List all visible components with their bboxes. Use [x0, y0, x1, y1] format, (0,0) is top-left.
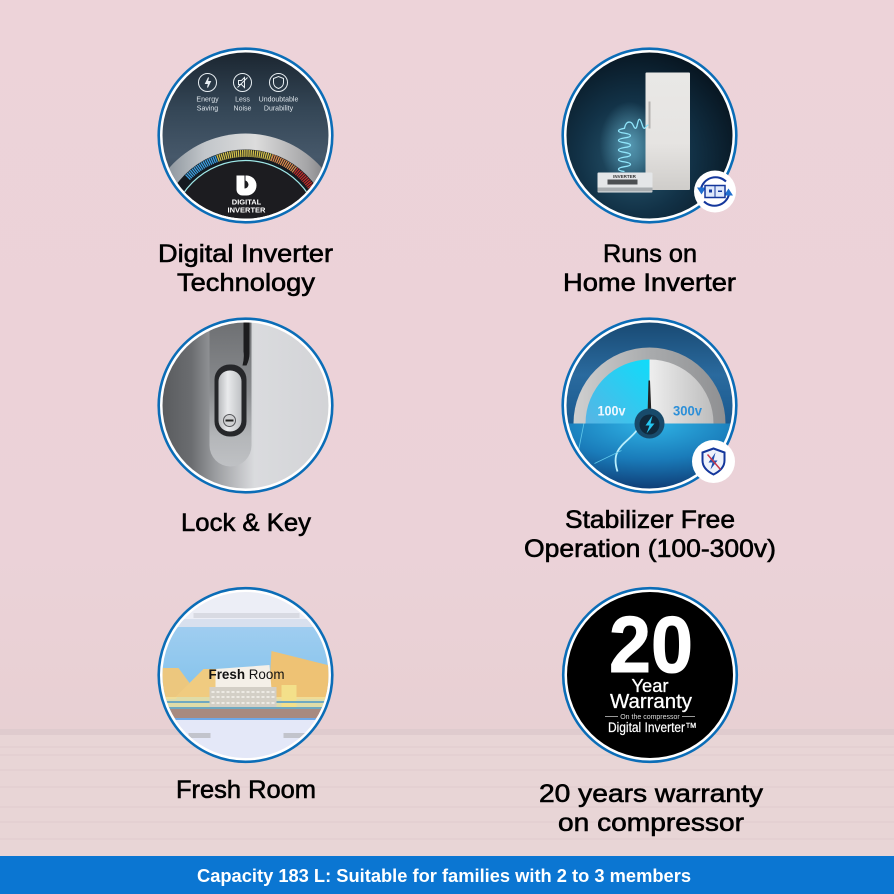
icon: 20 year warranty: 20 [609, 600, 693, 689]
icon: digital inverter technology [157, 47, 334, 224]
icon: digital inverter technology: Less [235, 96, 250, 104]
icon: 20 year warranty: Digital Inverter™ [608, 720, 697, 735]
heading: digital inverter technology: Digital Inverter [158, 240, 333, 268]
heading: fresh room: Fresh Room [176, 776, 316, 804]
heading: 20 years warranty [539, 780, 764, 837]
heading: stabilizer free operation: Operation (100-300v) [524, 535, 776, 563]
fridge [646, 72, 690, 190]
icon: 20 year warranty: Warranty [610, 691, 692, 713]
icon: digital inverter technology: Durability [264, 106, 294, 112]
icon: 20 year warranty: On the compressor [620, 714, 680, 721]
icon: digital inverter technology: Noise [234, 106, 252, 112]
heading: lock and key: Lock & Key [181, 509, 312, 537]
capacity banner [0, 856, 894, 894]
icon: digital inverter technology: Energy [196, 96, 219, 104]
icon: runs on home inverter: INVERTER [613, 174, 637, 179]
logo mark [236, 175, 257, 196]
heading: stabilizer free operation [524, 506, 776, 563]
heading: digital inverter technology: Technology [177, 269, 316, 297]
icon: digital inverter technology: Undoubtable [259, 96, 298, 104]
lightning [616, 430, 638, 472]
heading: 20 years warranty: on compressor [558, 809, 744, 837]
heading: digital inverter technology [158, 240, 333, 297]
icon: 20 year warranty [563, 588, 737, 762]
heading: runs on home inverter: Runs on [603, 240, 697, 268]
capacity banner: Capacity 183 L: Suitable for families with 2 to 3 members [197, 866, 691, 886]
cheese [270, 651, 328, 699]
heading: runs on home inverter: Home Inverter [563, 269, 736, 297]
icon: digital inverter technology: Saving [197, 106, 218, 112]
heading: 20 years warranty: 20 years warranty [539, 780, 764, 808]
icon: runs on home inverter [560, 46, 740, 226]
icon: digital inverter technology: DIGITAL [232, 198, 262, 206]
badge [694, 170, 736, 212]
icon: stabilizer gauge: 100v [598, 402, 626, 418]
icon: fresh room [156, 585, 336, 765]
icon: 20 year warranty: Year [632, 676, 668, 696]
floor [0, 729, 894, 856]
badge [692, 440, 735, 483]
power wave [618, 119, 648, 172]
feature icons [198, 74, 288, 92]
icon: stabilizer gauge [560, 316, 740, 496]
inverter box [598, 172, 652, 192]
icon: lock and key [156, 316, 336, 496]
icon: digital inverter technology: INVERTER [228, 206, 266, 214]
icon: stabilizer gauge: 300v [673, 402, 702, 418]
heading: runs on home inverter [563, 240, 736, 297]
icon: fresh room: Fresh Room [208, 667, 284, 682]
heading: stabilizer free operation: Stabilizer Free [565, 506, 735, 534]
